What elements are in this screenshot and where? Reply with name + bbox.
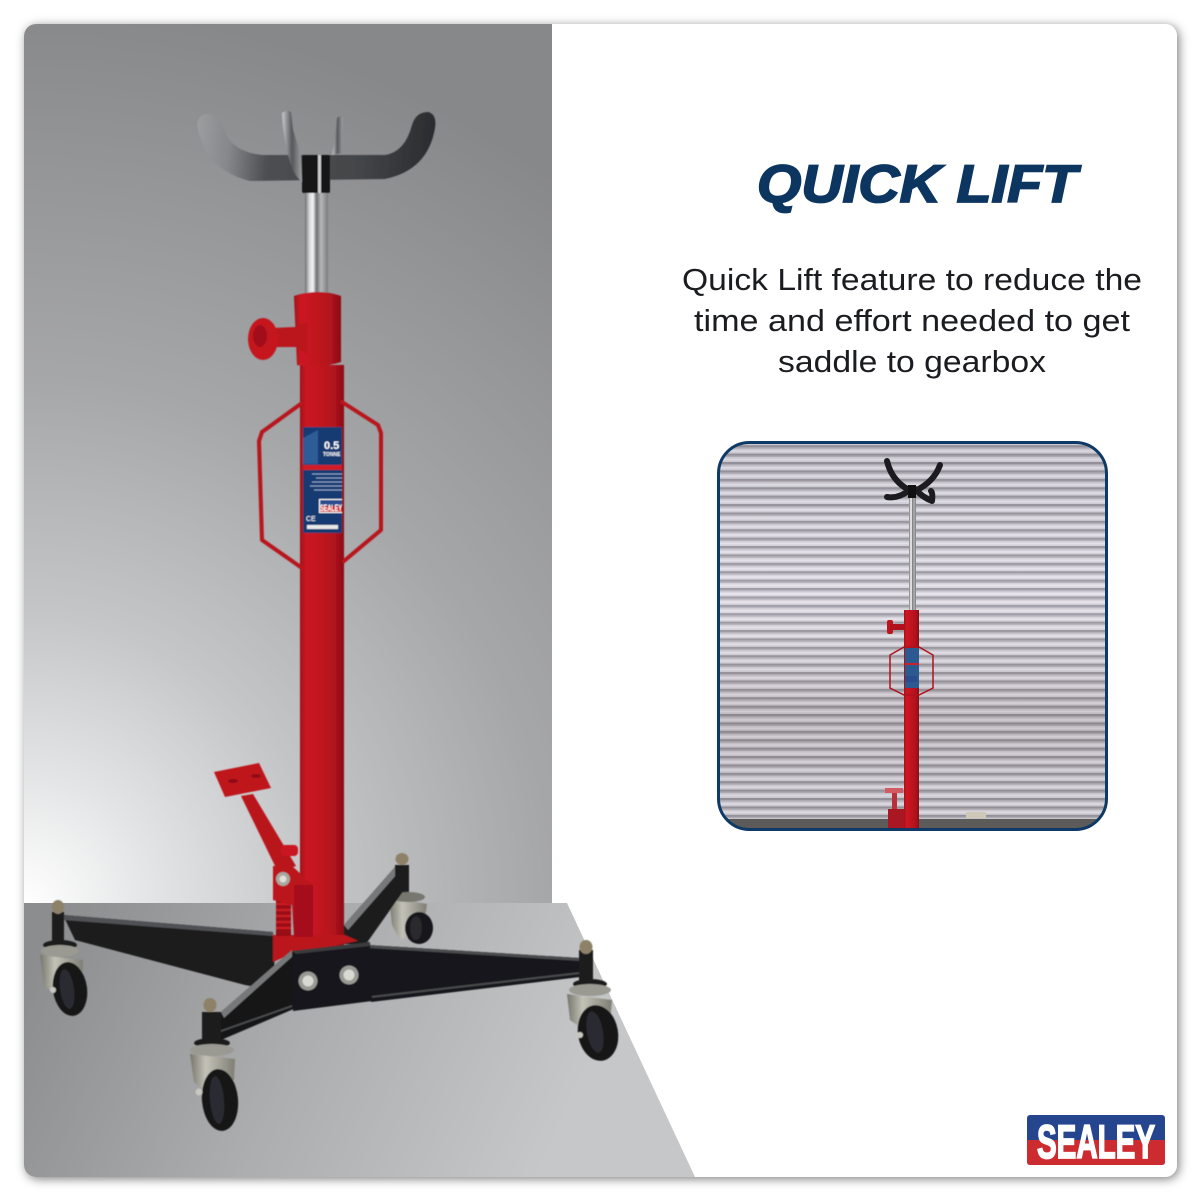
- panel: product photo: [24, 24, 695, 1177]
- inset border: [718, 442, 1106, 830]
- jack left arm: [63, 915, 275, 990]
- jack specification label: CE: [306, 516, 316, 523]
- description text: Quick Lift feature to reduce the: [682, 262, 1142, 297]
- jack chrome rod: [305, 190, 328, 294]
- photo floor: [24, 903, 695, 1177]
- title: QUICK LIFT: [757, 155, 1082, 214]
- ground strip: [728, 819, 1097, 828]
- jack centre plate with bolts: [292, 942, 372, 1011]
- description text: saddle to gearbox: [778, 344, 1047, 379]
- jack rear castor: [389, 882, 433, 944]
- jack main tube: [300, 365, 344, 950]
- jack specification label: [303, 427, 342, 533]
- jack front castor: [190, 998, 241, 1132]
- small warning plate: [966, 812, 986, 818]
- inset photo: jack at full height: [718, 442, 1106, 830]
- jack foot pedal: [214, 763, 298, 886]
- photo wall backdrop: [24, 24, 552, 904]
- jack right arm: [368, 945, 580, 1002]
- jack pump bracket: [273, 866, 358, 962]
- roller shutter background: [719, 443, 1106, 829]
- inset jack: [885, 461, 940, 829]
- jack specification label: 0.5: [324, 440, 339, 452]
- jack front arm: [221, 950, 296, 1040]
- jack rear arm: [344, 853, 409, 944]
- jack saddle: [197, 111, 435, 193]
- jack handle hoops: [259, 402, 381, 568]
- jack left castor: [40, 900, 91, 1018]
- jack right castor: [567, 940, 623, 1064]
- jack collar: [294, 292, 341, 366]
- description text: [682, 262, 1142, 379]
- description text: time and effort needed to get: [694, 303, 1130, 338]
- transmission jack: [40, 111, 623, 1132]
- jack release knob: [248, 318, 307, 360]
- jack specification label: SEALEY: [320, 503, 342, 513]
- jack specification label: TONNE: [323, 452, 341, 458]
